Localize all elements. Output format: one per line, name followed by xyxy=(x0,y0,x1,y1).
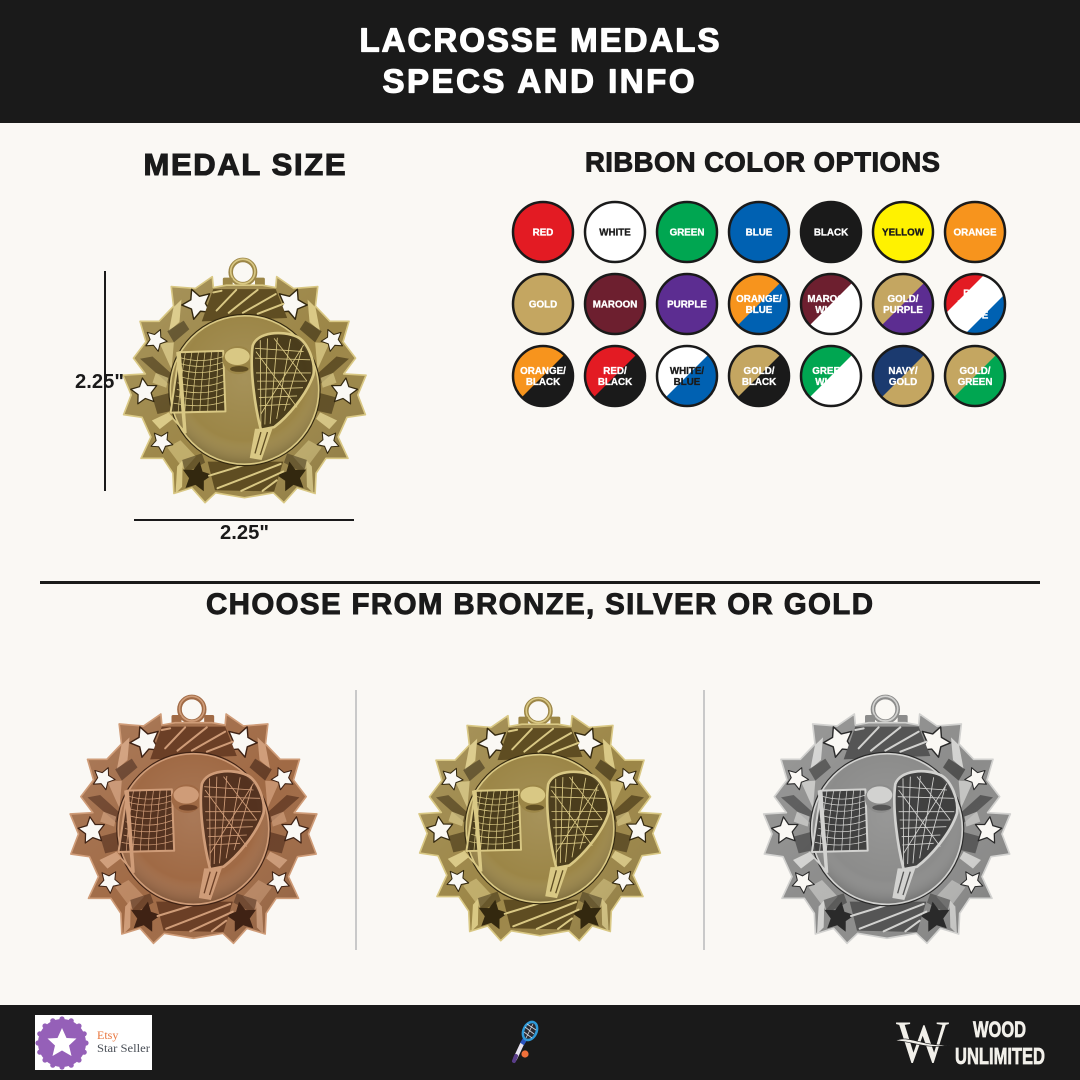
icon: scalloped purple star badge xyxy=(35,1016,89,1070)
badge: Etsy Star Seller xyxy=(35,1015,152,1070)
swatch: white: WHITE xyxy=(599,228,631,238)
width label: 2.25" xyxy=(220,522,269,544)
swatch: maroon/white: WHITE xyxy=(815,305,847,316)
swatch: red/black: BLACK xyxy=(598,377,632,388)
swatch: gold xyxy=(513,274,573,334)
width dimension line xyxy=(134,519,354,521)
swatch: black xyxy=(801,202,861,262)
swatch: white/blue xyxy=(656,344,718,408)
swatch: orange/blue: ORANGE/ xyxy=(736,294,782,305)
footer bar xyxy=(0,1005,1080,1080)
swatch: green xyxy=(657,202,717,262)
swatch: blue: BLUE xyxy=(746,228,773,238)
swatch: gold/purple: PURPLE xyxy=(883,305,923,316)
swatch: maroon/white: MAROON/ xyxy=(807,294,855,305)
swatch: maroon/white xyxy=(800,272,862,336)
medal: bronze xyxy=(70,696,317,943)
swatch: red xyxy=(513,202,573,262)
swatch: white xyxy=(585,202,645,262)
swatch: gold/purple: GOLD/ xyxy=(887,294,919,305)
header bar xyxy=(0,0,1080,123)
swatch: gold/purple xyxy=(872,272,934,336)
swatch: gold/green: GOLD/ xyxy=(959,366,991,377)
height label: 2.25" xyxy=(75,371,124,393)
swatch: orange/black: ORANGE/ xyxy=(520,366,566,377)
swatch: green/white: GREEN/ xyxy=(812,366,850,377)
swatch: gold/green: GREEN xyxy=(958,377,992,388)
swatch: gold: GOLD xyxy=(529,300,557,310)
swatch: gold/black: GOLD/ xyxy=(743,366,775,377)
swatch: red/white/blue: WHITE/ xyxy=(958,300,992,310)
logo: Wood Unlimited: W xyxy=(896,1009,949,1075)
title: SPECS AND INFO xyxy=(382,62,694,100)
swatch: blue xyxy=(729,202,789,262)
heading: medal size: MEDAL SIZE xyxy=(144,147,346,182)
swatch: green: GREEN xyxy=(670,228,704,238)
swatch: red/black: RED/ xyxy=(603,366,627,377)
swatch: white/blue: WHITE/ xyxy=(670,366,704,377)
swatch: red/white/blue: BLUE xyxy=(962,310,989,322)
swatch: red/white/blue xyxy=(944,272,1006,336)
swatch: purple: PURPLE xyxy=(667,300,707,310)
medal: silver xyxy=(764,696,1010,943)
heading: ribbon color options: RIBBON COLOR OPTIONS xyxy=(585,146,940,178)
swatch: orange/black xyxy=(512,344,574,408)
swatch: orange/blue xyxy=(728,272,790,336)
heading: choose finish: CHOOSE FROM BRONZE, SILVER OR GOLD xyxy=(206,588,873,621)
badge: Etsy Star Seller: Etsy xyxy=(97,1028,118,1042)
gold medal with dimensions xyxy=(123,259,366,503)
swatch: maroon: MAROON xyxy=(593,300,637,310)
height dimension line xyxy=(104,271,106,491)
medal: gold xyxy=(419,698,661,941)
panel: medal size diagram xyxy=(75,259,366,544)
swatch: yellow xyxy=(873,202,933,262)
swatch: red/white/blue: RED/ xyxy=(963,288,987,300)
swatch: navy/gold: GOLD xyxy=(889,377,917,388)
swatch: navy/gold xyxy=(872,344,934,408)
icon: lacrosse stick xyxy=(514,1020,540,1061)
swatch: green/white xyxy=(800,344,862,408)
swatch: orange/blue: BLUE xyxy=(746,305,773,316)
logo: Wood Unlimited xyxy=(895,1009,1045,1075)
swatch: gold/black: BLACK xyxy=(742,377,776,388)
swatch: orange: ORANGE xyxy=(953,228,997,238)
swatch: red/black xyxy=(584,344,646,408)
swatch: red: RED xyxy=(533,228,553,238)
swatch: green/white: WHITE xyxy=(815,377,847,388)
swatch: white/blue: BLUE xyxy=(674,377,701,388)
logo: Wood Unlimited: WOOD xyxy=(973,1017,1026,1042)
swatch: gold/green xyxy=(944,344,1006,408)
swatch: orange xyxy=(945,202,1005,262)
swatch: orange/black: BLACK xyxy=(526,377,560,388)
swatch: maroon xyxy=(585,274,645,334)
logo: Wood Unlimited: UNLIMITED xyxy=(955,1043,1045,1069)
swatch: purple xyxy=(657,274,717,334)
panel: ribbon swatches xyxy=(503,202,1015,416)
swatch: navy/gold: NAVY/ xyxy=(888,366,918,377)
title xyxy=(360,22,720,100)
swatch: gold/black xyxy=(728,344,790,408)
title: LACROSSE MEDALS xyxy=(360,22,720,58)
badge: Etsy Star Seller: Star Seller xyxy=(97,1043,150,1055)
swatch: black: BLACK xyxy=(814,228,848,238)
swatch: yellow: YELLOW xyxy=(882,228,925,238)
